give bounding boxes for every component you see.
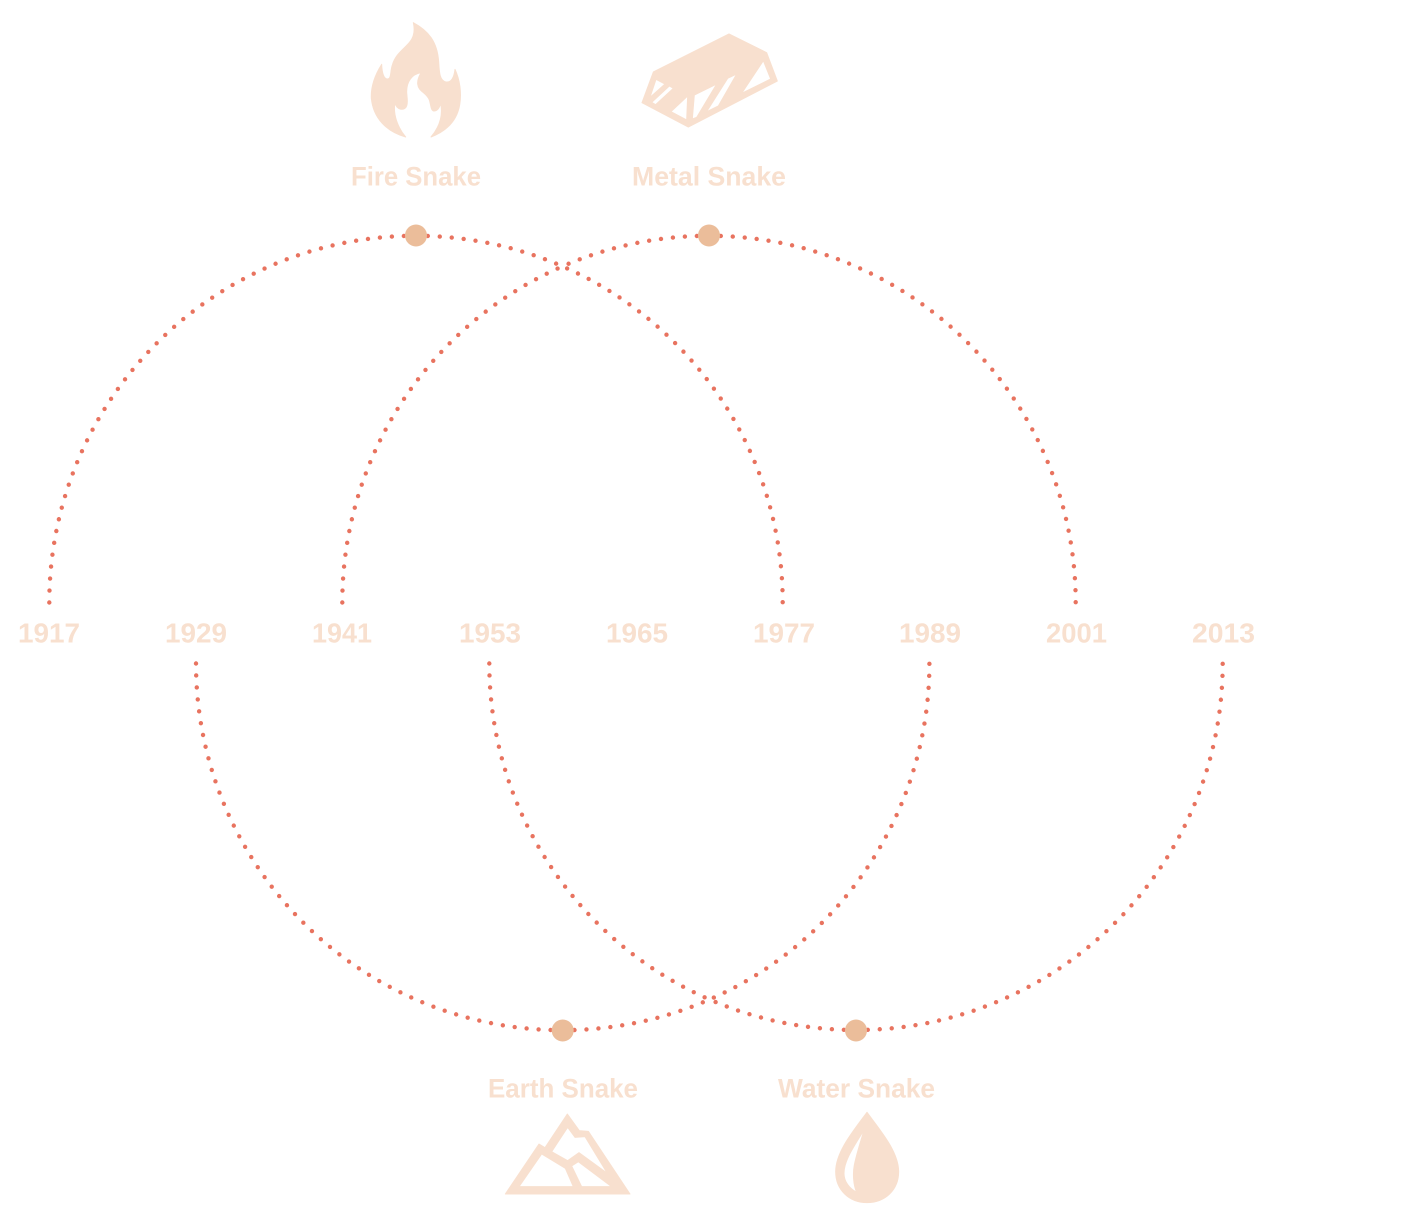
arc: earth snake 1929 to 1989 <box>196 664 929 1030</box>
year: 2013: 2013 <box>1192 618 1255 648</box>
arc: water snake 1953 to 2013 <box>489 664 1223 1030</box>
node: fire snake <box>405 224 427 246</box>
year: 2001: 2001 <box>1046 618 1107 648</box>
label: Fire Snake: Fire Snake <box>351 162 481 192</box>
icon: water drop <box>836 1112 899 1203</box>
arc: fire snake 1917 to 1977 <box>49 236 783 603</box>
node: metal snake <box>698 224 720 246</box>
year: 1929: 1929 <box>165 618 227 648</box>
icon: mountain <box>505 1114 630 1194</box>
label: Water Snake: Water Snake <box>778 1074 935 1104</box>
year: 1989: 1989 <box>899 618 961 648</box>
arc: metal snake 1941 to 2001 <box>342 236 1076 603</box>
node: water snake <box>845 1020 867 1042</box>
year: 1941: 1941 <box>312 618 372 648</box>
year: 1917: 1917 <box>18 618 80 648</box>
year: 1953: 1953 <box>459 618 521 648</box>
node: earth snake <box>552 1020 574 1042</box>
icon: metal ingot <box>642 34 777 127</box>
year: 1977: 1977 <box>753 618 815 648</box>
label: Metal Snake: Metal Snake <box>632 162 786 192</box>
year: 1965: 1965 <box>606 618 668 648</box>
icon: fire <box>371 23 460 137</box>
label: Earth Snake: Earth Snake <box>488 1074 638 1104</box>
